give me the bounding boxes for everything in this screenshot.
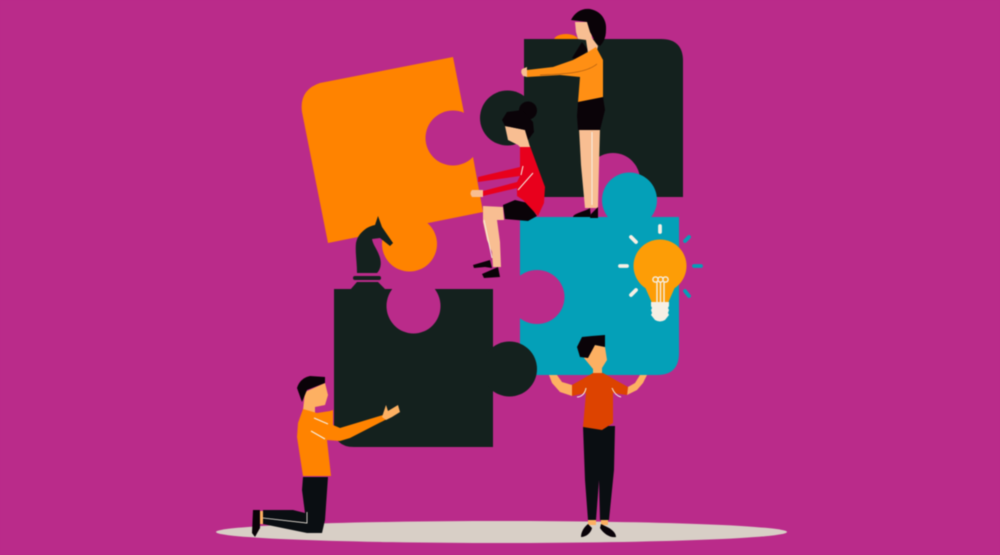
socket: dark top piece — [586, 153, 640, 207]
puzzle piece: teal — [520, 172, 679, 375]
puzzle piece: orange — [302, 57, 483, 272]
figure: sitting woman — [470, 102, 545, 278]
orange small tab behind dark piece — [554, 34, 578, 46]
figure: standing woman — [521, 9, 606, 218]
icon: chess knight — [350, 216, 393, 290]
figure: standing man — [549, 335, 647, 537]
socket: orange piece — [426, 110, 480, 166]
icon: light bulb — [620, 226, 701, 322]
ground ellipse — [216, 521, 787, 543]
puzzle piece: dark top — [480, 39, 683, 197]
figure: kneeling man — [252, 376, 400, 537]
socket: teal piece — [510, 270, 564, 324]
socket: dark lower piece — [386, 278, 440, 334]
puzzle piece: dark lower — [334, 289, 537, 447]
socket strip under dark piece — [586, 180, 640, 198]
